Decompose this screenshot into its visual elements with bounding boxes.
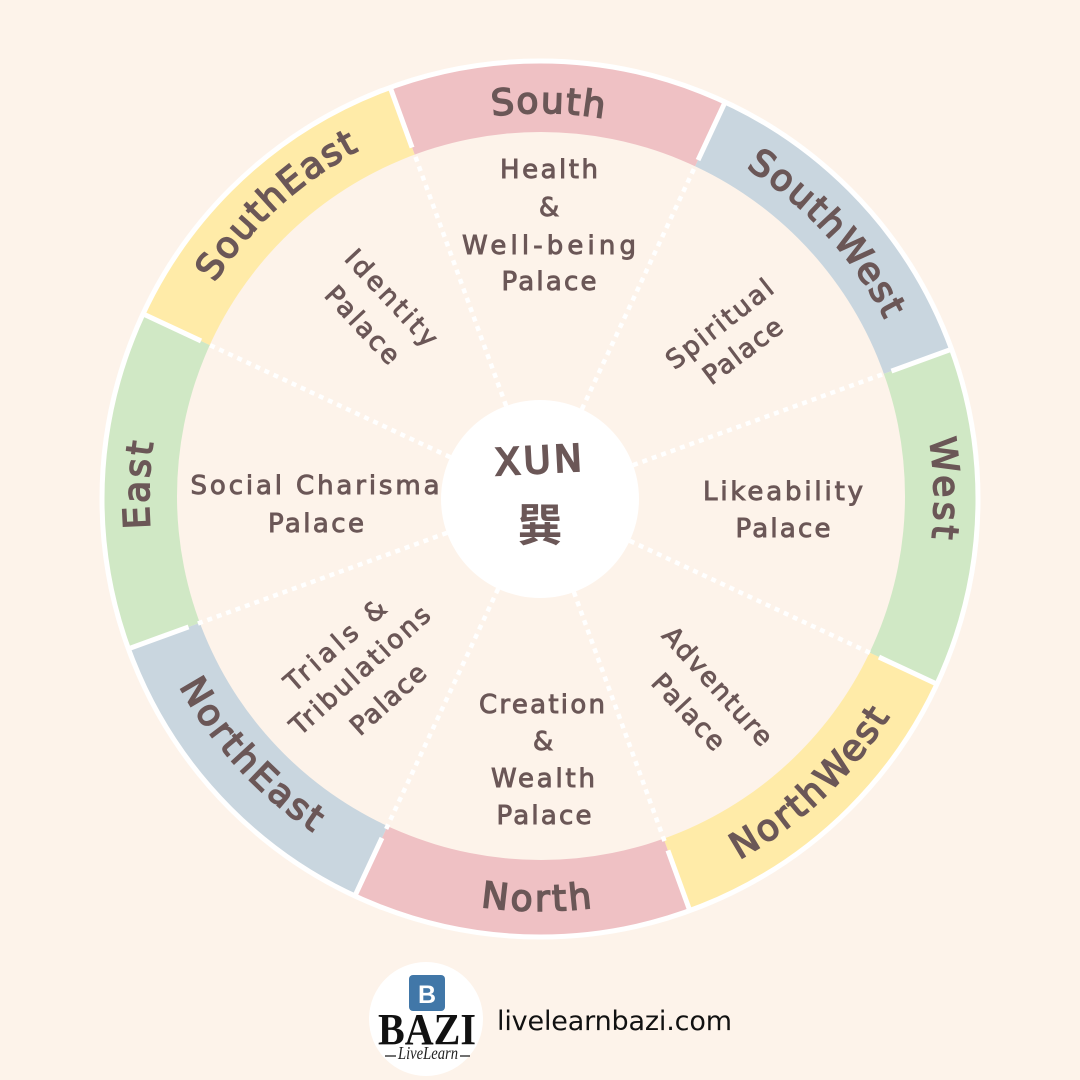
logo tagline: LiveLearn: [397, 1043, 458, 1063]
website url: livelearnbazi.com: [497, 1006, 732, 1037]
palace label: Creation & Wealth: [479, 690, 605, 831]
direction label: West: West: [930, 436, 960, 540]
palace label: Trials & Tribulations: Trials &: [278, 594, 393, 699]
palace label: Health & Well-being: [462, 155, 636, 297]
palace label: Trials & Tribulations: Palace: [344, 658, 433, 742]
ring segment: West: [540, 349, 978, 684]
palace label: Adventure: Adventure: [656, 621, 778, 752]
palace label: Social Charisma: Social Charisma: [190, 471, 440, 501]
ring segment: East: [102, 314, 540, 649]
ring segment: NorthWest: [540, 499, 937, 911]
ring segment: South: [390, 61, 725, 499]
direction label: SouthWest: SouthWest: [748, 149, 904, 320]
direction label: North: North: [483, 880, 590, 912]
ring segment: SouthWest: [540, 102, 952, 499]
center title: XUN: [494, 437, 583, 484]
palace label: Trials & Tribulations: Tribulations: [284, 600, 437, 742]
palace label: Creation & Wealth: &: [533, 727, 553, 757]
palace label: Likeability: Likeability: [703, 477, 863, 507]
palace label: Identity: Palace: [318, 280, 406, 371]
palace label: Likeability: [703, 477, 863, 544]
ring segment: SouthEast: [143, 87, 540, 499]
direction label: NorthWest: NorthWest: [728, 706, 890, 860]
logo: [369, 962, 483, 1076]
palace label: Spiritual: Palace: [697, 312, 789, 391]
ring segment: North: [355, 499, 690, 937]
center hub: [441, 400, 639, 598]
palace label: Likeability: Palace: [736, 514, 830, 544]
palace label: Identity: Identity: [338, 244, 443, 353]
direction label: East: East: [122, 440, 154, 527]
direction label: South: South: [492, 87, 604, 119]
logo icon: B: [418, 981, 436, 1009]
palace label: Health & Well-being: Palace: [502, 267, 596, 297]
direction label: SouthEast: SouthEast: [196, 130, 360, 281]
palace label: Social Charisma: Palace: [268, 509, 364, 539]
palace label: Health & Well-being: Health: [500, 155, 598, 185]
palace label: Creation & Wealth: Wealth: [491, 764, 595, 794]
logo wordmark: BAZI: [378, 1005, 476, 1054]
inner field: [177, 132, 905, 860]
center glyph: 巽: [517, 489, 563, 554]
direction label: NorthEast: NorthEast: [180, 674, 324, 833]
palace label: Creation & Wealth: Palace: [496, 801, 592, 831]
palace label: Adventure: Palace: [645, 668, 731, 757]
palace label: Spiritual: Spiritual: [660, 273, 780, 376]
wheel: [102, 61, 978, 937]
palace label: Social Charisma: [190, 471, 440, 539]
palace label: Creation & Wealth: Creation: [479, 690, 605, 720]
ring segment: NorthEast: [128, 499, 540, 896]
palace label: Health & Well-being: Well-being: [462, 231, 636, 261]
palace label: Health & Well-being: &: [539, 193, 559, 223]
